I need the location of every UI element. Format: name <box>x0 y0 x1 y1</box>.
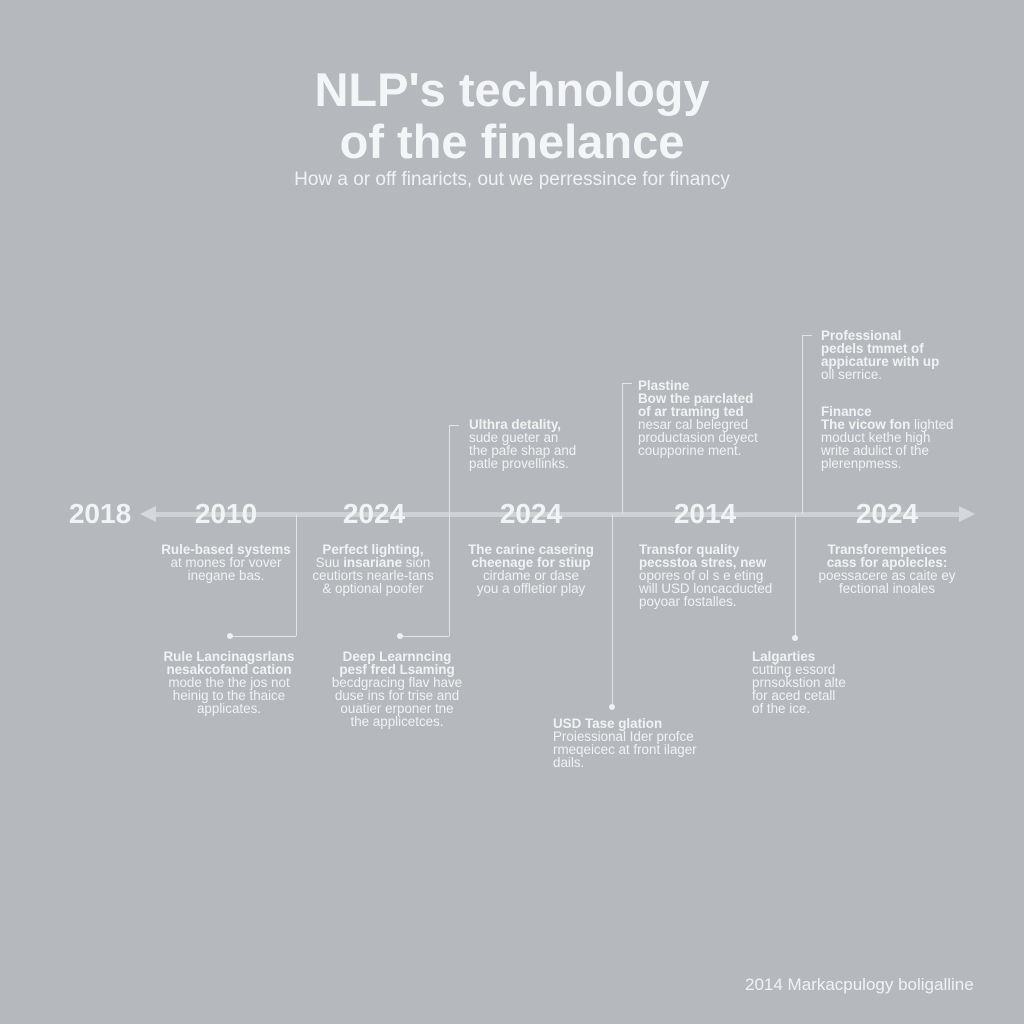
text: Professional: pedels tmmet of <box>821 341 924 356</box>
text: Lalgarties: of the ice. <box>752 701 810 716</box>
text: Plastine: Plastine <box>638 378 689 393</box>
year labels: 2024 <box>856 498 918 529</box>
text: lower left: Rule Lancinagsrlans <box>164 649 294 664</box>
text: 2010 below: Rule-based systems <box>161 542 291 557</box>
text: Plastine: coupporine ment. <box>638 443 741 458</box>
text: 2024b below: The carine casering <box>468 542 594 557</box>
year labels: 2010 <box>195 498 257 529</box>
text: USD: rmeqeicec at front ilager <box>553 742 697 757</box>
text: USD: Proiessional Ider profce <box>553 729 694 744</box>
text: Finance: moduct kethe high <box>821 430 930 445</box>
text: lower left: heinig to the thaice <box>173 688 285 703</box>
text: Professional: appicature with up <box>821 354 939 369</box>
text: Ulthra: patle provellinks. <box>469 456 569 471</box>
text: Professional: Professional <box>821 328 901 343</box>
text: Plastine: of ar traming ted <box>638 404 744 419</box>
title: NLP's technology <box>314 63 710 116</box>
text: Lalgarties <box>752 649 846 716</box>
text: 2014 below: poyoar fostalles. <box>639 594 737 609</box>
year labels <box>69 498 918 529</box>
text: 2024 below: & optional poofer <box>322 581 424 596</box>
text: 2024b below: you a offletior play <box>477 581 585 596</box>
text: USD <box>553 716 697 770</box>
text: Plastine <box>638 378 758 458</box>
text: deep learning: the applicetces. <box>350 714 444 729</box>
text: Plastine: productasion deyect <box>638 430 758 445</box>
text: Lalgarties: Lalgarties <box>752 649 815 664</box>
text: 2014 below: Transfor quality <box>639 542 739 557</box>
title: of the finelance <box>340 115 684 168</box>
text: 2024c below: fectional inoales <box>839 581 935 596</box>
year labels: 2024 <box>500 498 562 529</box>
text: 2024 below: Perfect lighting, <box>322 542 424 557</box>
text: 2024 below: ceutiorts nearle-tans <box>312 568 434 583</box>
subtitle: How a or off finaricts, out we perressince for financy <box>294 169 730 190</box>
year labels: 2014 <box>674 498 736 529</box>
text: Ulthra: sude gueter an <box>469 430 558 445</box>
text: USD: dails. <box>553 755 584 770</box>
text: deep learning: Deep Learnncing <box>343 649 451 664</box>
text: Ulthra: Ulthra detality, <box>469 417 561 432</box>
text: lower left <box>164 649 294 716</box>
text: Plastine: Bow the parclated <box>638 391 753 406</box>
text: Finance: write adulict of the <box>821 443 929 458</box>
text: deep learning: ouatier erponer tne <box>340 701 454 716</box>
text: deep learning: becdgracing flav have <box>332 675 462 690</box>
text: Finance: plerenpmess. <box>821 456 901 471</box>
text: 2010 below: inegane bas. <box>188 568 264 583</box>
text: 2024c below: poessacere as caite ey <box>819 568 955 583</box>
text: Professional <box>821 328 939 382</box>
text: 2014 below: will USD loncacducted <box>639 581 772 596</box>
text: 2014 below <box>639 542 772 609</box>
year labels: 2018 <box>69 498 131 529</box>
timeline axis <box>140 506 974 522</box>
text: 2024c below: Transforempetices <box>827 542 947 557</box>
text: lower left: applicates. <box>197 701 261 716</box>
text: deep learning <box>332 649 462 729</box>
text: Ulthra: the pafe shap and <box>469 443 576 458</box>
text: Ulthra <box>469 417 576 471</box>
text: 2014 below: pecsstoa stres, new <box>639 555 766 570</box>
text: deep learning: pesf fred Lsaming <box>339 662 455 677</box>
title <box>314 63 710 168</box>
text: 2024 below: Suu insariane sion <box>316 555 430 570</box>
text: lower left: mode the the jos not <box>168 675 290 690</box>
text: 2010 below: at mones for vover <box>171 555 281 570</box>
text: Lalgarties: prnsokstion alte <box>752 675 846 690</box>
text: Finance: The vicow fon lighted <box>821 417 953 432</box>
text: Plastine: nesar cal belegred <box>638 417 748 432</box>
text: USD: USD Tase glation <box>553 716 662 731</box>
text: 2024b below <box>468 542 594 596</box>
text: 2024 below <box>312 542 434 596</box>
text: 2024b below: cirdame or dase <box>483 568 579 583</box>
text: Finance: Finance <box>821 404 872 419</box>
text: Finance <box>821 404 953 471</box>
text: 2024c below <box>819 542 956 596</box>
text: 2024c below: cass for apolecles: <box>827 555 947 570</box>
text: 2024b below: cheenage for stiup <box>471 555 591 570</box>
text: deep learning: duse ins for trise and <box>335 688 459 703</box>
footer: 2014 Markacpulogy boligalline <box>745 975 974 994</box>
year labels: 2024 <box>343 498 405 529</box>
text: Professional: oll serrice. <box>821 367 882 382</box>
text: lower left: nesakcofand cation <box>166 662 292 677</box>
text: Lalgarties: for aced cetall <box>752 688 835 703</box>
text: Lalgarties: cutting essord <box>752 662 835 677</box>
text: 2014 below: opores of ol s e eting <box>639 568 763 583</box>
text: 2010 below <box>161 542 291 583</box>
